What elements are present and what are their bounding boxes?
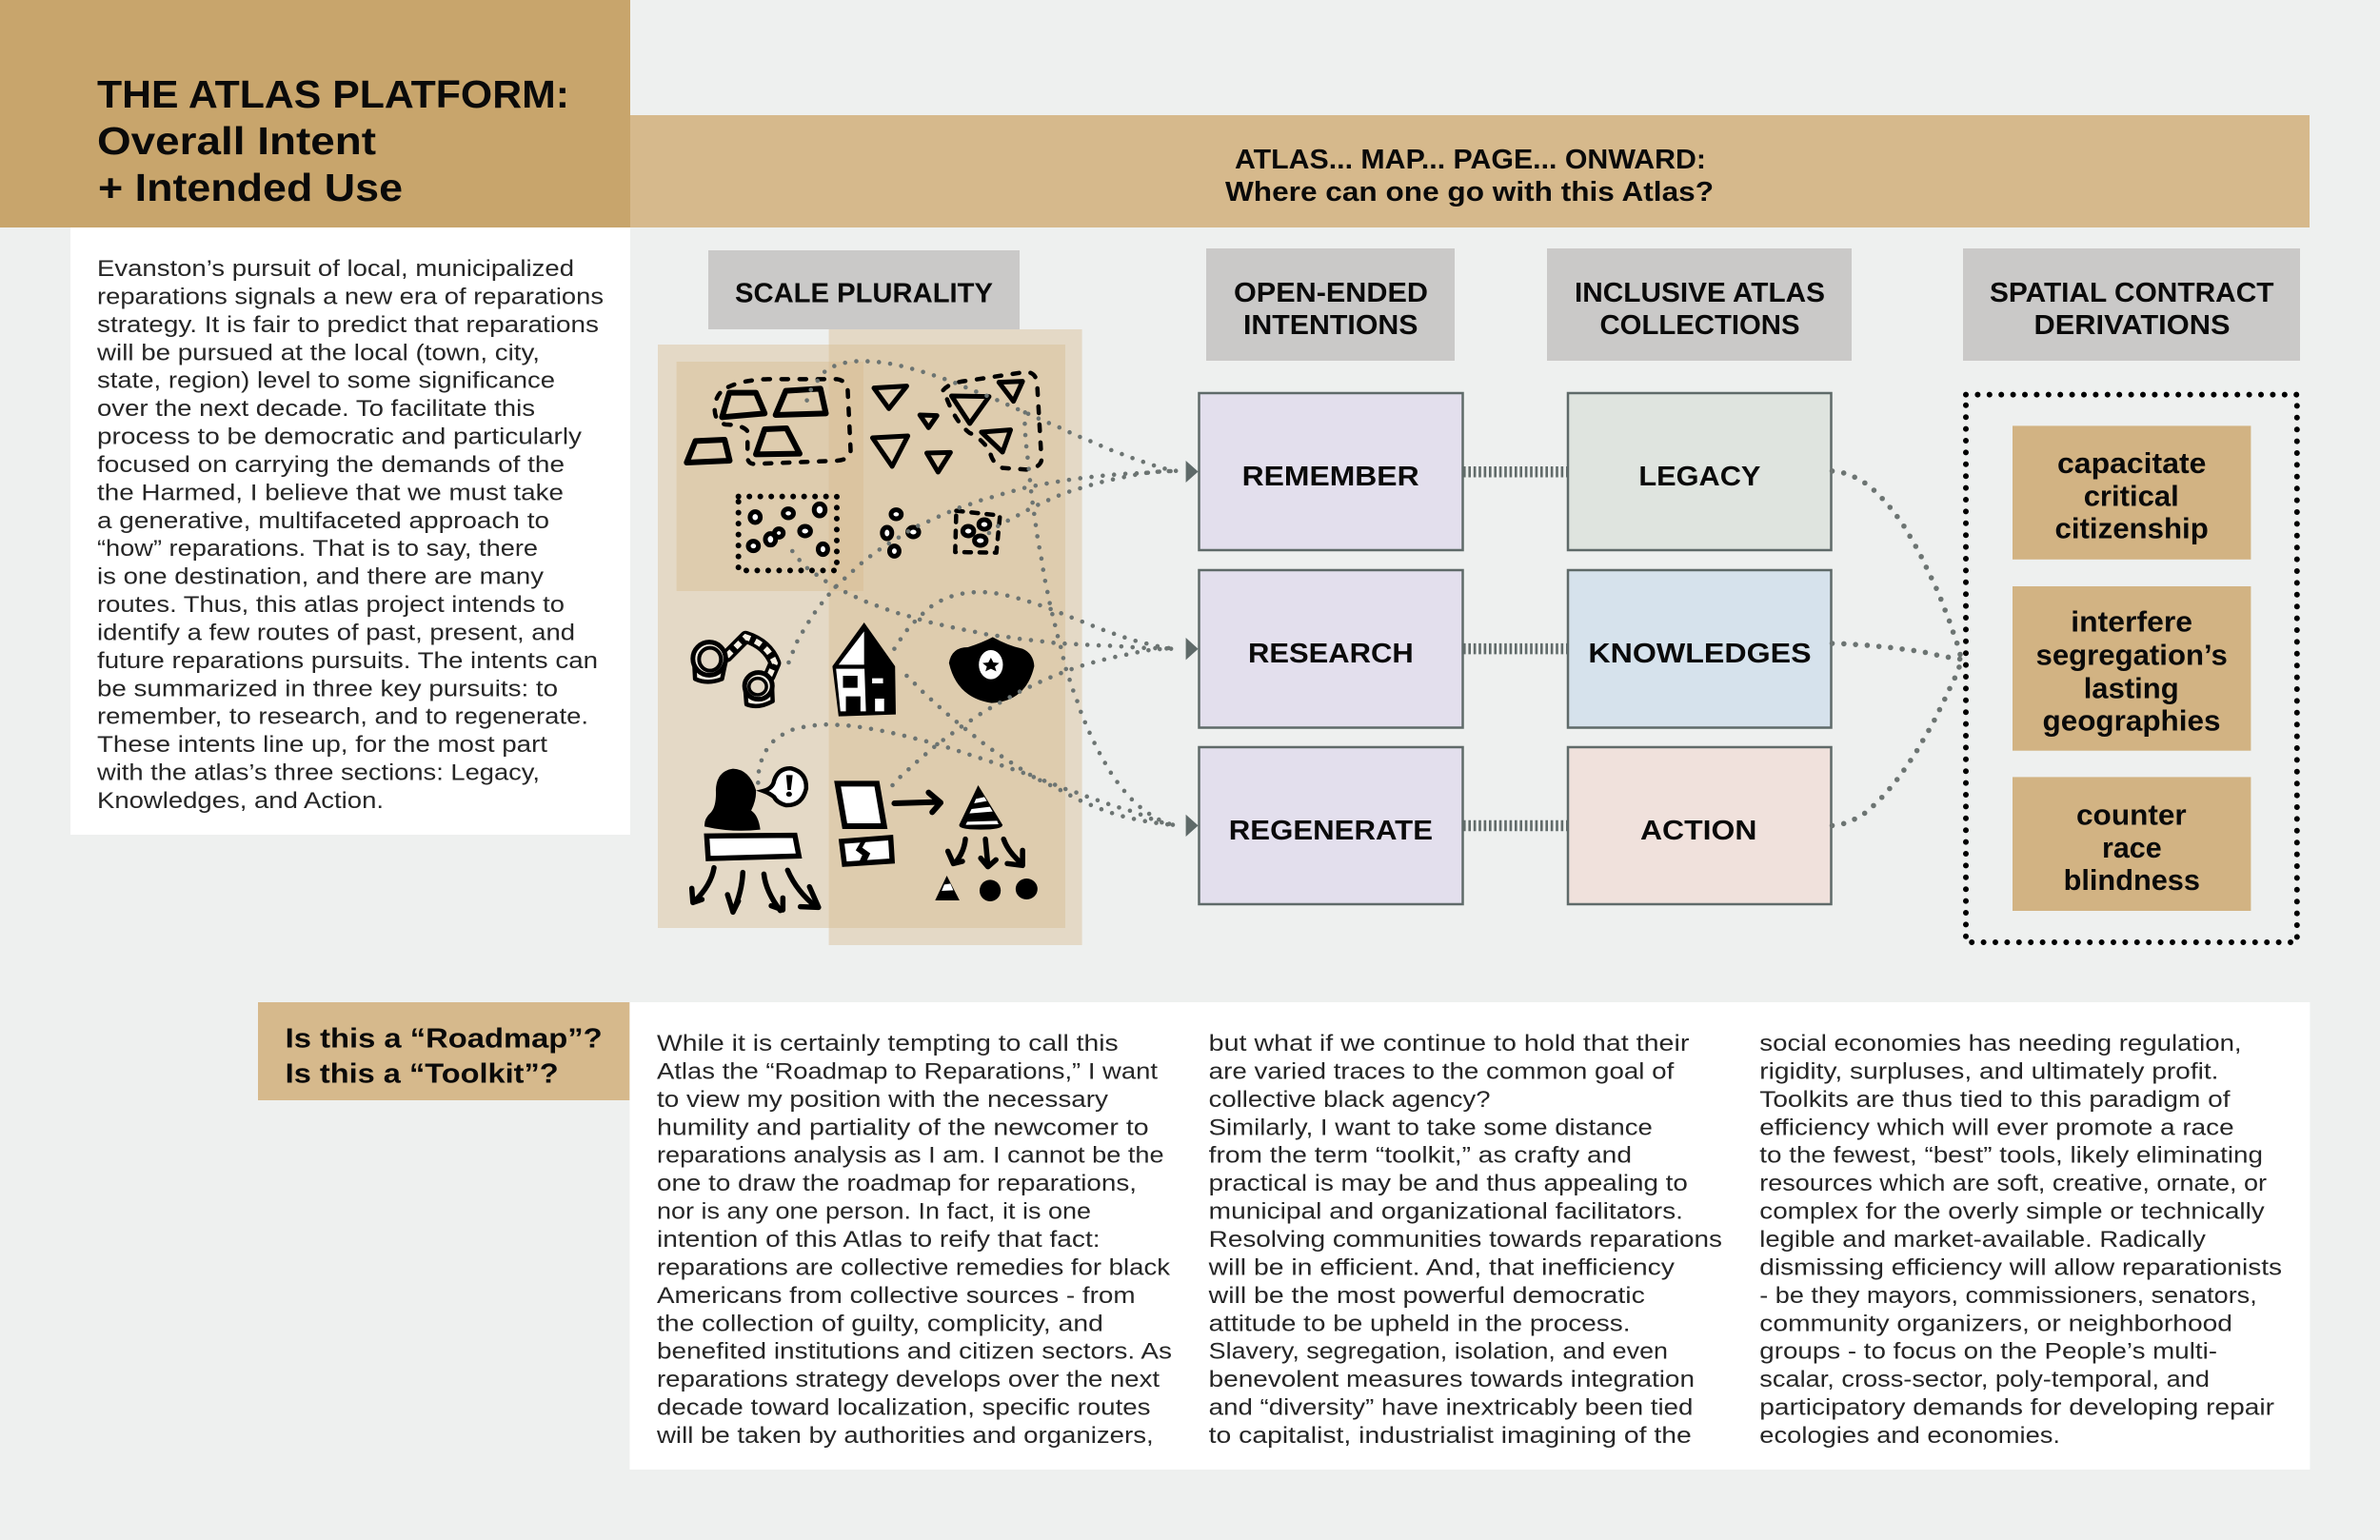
panel: scale plurality overlapping swatches [658, 329, 1082, 945]
box: action: ACTION [1640, 816, 1756, 846]
intro text panel: focused on carrying the demands of the [97, 452, 565, 478]
text column 1: one to draw the roadmap for reparations, [657, 1171, 1137, 1196]
intro text panel: process to be democratic and particularly [97, 424, 582, 449]
title block [0, 0, 630, 227]
intro text panel: identify a few routes of past, present, and [97, 621, 575, 645]
text column 1: to view my position with the necessary [657, 1087, 1108, 1113]
intro text panel: These intents line up, for the most part [97, 732, 547, 758]
text column 3: community organizers, or neighborhood [1759, 1311, 2232, 1336]
text column 3: groups - to focus on the People’s multi- [1759, 1339, 2217, 1365]
intro text panel: remember, to research, and to regenerate. [97, 704, 588, 730]
box: counter race blindness [2013, 777, 2251, 911]
text column 1: decade toward localization, specific routes [657, 1395, 1150, 1421]
text column 2: Slavery, segregation, isolation, and even [1209, 1339, 1668, 1365]
box: regenerate [1200, 747, 1462, 904]
heading: open-ended intentions: INTENTIONS [1243, 310, 1418, 341]
intro text panel [70, 227, 630, 835]
intro text panel: the Harmed, I believe that we must take [97, 480, 564, 505]
icon: loose circles [883, 510, 919, 556]
icon: dashed circle group [955, 511, 1000, 553]
box: research [1200, 570, 1462, 727]
box: capacitate critical citizenship: critical [2084, 479, 2179, 512]
text column 3: social economies has needing regulation, [1759, 1031, 2242, 1056]
box: capacitate critical citizenship [2013, 425, 2251, 560]
text column 1: humility and partiality of the newcomer to [657, 1115, 1149, 1140]
intro text panel: will be pursued at the local (town, city, [96, 340, 540, 365]
heading: spatial contract derivations [1963, 248, 2300, 361]
title block: Overall Intent [97, 119, 376, 163]
top banner: atlas map page onward [630, 115, 2310, 227]
title block: THE ATLAS PLATFORM: [97, 72, 569, 116]
text column 2: but what if we continue to hold that their [1209, 1031, 1689, 1056]
box: remember: REMEMBER [1242, 462, 1419, 492]
text column 1: Atlas the “Roadmap to Reparations,” I want [657, 1058, 1158, 1084]
text column 2 [1208, 1031, 1722, 1449]
heading: open-ended intentions: OPEN-ENDED [1234, 278, 1428, 308]
callout: roadmap or toolkit: Is this a “Roadmap”? [286, 1024, 603, 1055]
text column 3: - be they mayors, commissioners, senators, [1759, 1283, 2257, 1309]
text column 3: efficiency which will ever promote a race [1759, 1115, 2234, 1140]
text column 1: Americans from collective sources - from [657, 1283, 1136, 1309]
intro text panel: state, region) level to some significance [97, 368, 555, 394]
text column 2: will be in efficient. And, that inefficiency [1208, 1254, 1675, 1280]
heading: spatial contract derivations: SPATIAL CONTRACT [1990, 278, 2274, 308]
top banner: atlas map page onward: ATLAS... MAP... PAGE... ONWARD: [1235, 145, 1706, 175]
box: research: RESEARCH [1248, 639, 1414, 669]
text column 1: will be taken by authorities and organizers, [656, 1423, 1154, 1449]
intro text panel: is one destination, and there are many [97, 564, 544, 590]
icon: police hat [949, 637, 1034, 703]
text column 1 [656, 1031, 1172, 1449]
box: counter race blindness: blindness [2064, 863, 2200, 897]
intro text panel: Knowledges, and Action. [97, 788, 384, 814]
dotted connectors: collections to spatial contract [1833, 471, 1961, 825]
text column 1: reparations strategy develops over the next [657, 1367, 1160, 1392]
box: interfere segregation's lasting geographies: lasting [2084, 671, 2179, 704]
callout: roadmap or toolkit: Is this a “Toolkit”? [286, 1058, 559, 1089]
text column 1: the collection of guilty, complicity, and [657, 1311, 1103, 1336]
heading: spatial contract derivations: DERIVATIONS [2033, 310, 2230, 341]
intro text panel: over the next decade. To facilitate this [97, 396, 535, 422]
text column 2: benevolent measures towards integration [1209, 1367, 1695, 1392]
icon: trapezoid cluster [686, 379, 851, 464]
box: interfere segregation's lasting geographies: segregation’s [2035, 638, 2228, 672]
intro text panel: Evanston’s pursuit of local, municipalized [97, 256, 574, 282]
icon: house [832, 622, 896, 717]
heading: inclusive atlas collections: COLLECTIONS [1599, 310, 1799, 341]
text column 2: are varied traces to the common goal of [1209, 1058, 1675, 1084]
intro text panel: with the atlas’s three sections: Legacy, [96, 760, 540, 786]
intro text panel: reparations signals a new era of reparations [97, 284, 604, 309]
text column 2: practical is may be and thus appealing to [1209, 1171, 1688, 1196]
box: regenerate: REGENERATE [1229, 816, 1433, 846]
heading: scale plurality [708, 250, 1020, 329]
text column 1: reparations analysis as I am. I cannot be the [657, 1143, 1164, 1169]
icons: scale plurality sketches [686, 372, 1041, 912]
text column 2: Similarly, I want to take some distance [1209, 1115, 1653, 1140]
text column 3: Toolkits are thus tied to this paradigm of [1759, 1087, 2231, 1113]
box: remember [1200, 393, 1462, 550]
callout: roadmap or toolkit [258, 1002, 629, 1100]
intro text panel: a generative, multifaceted approach to [97, 508, 549, 534]
icon: handcuffs [693, 637, 775, 706]
box: legacy: LEGACY [1638, 462, 1760, 492]
heading: scale plurality: SCALE PLURALITY [735, 278, 993, 308]
icon: dotted circle group [739, 497, 837, 570]
text column 1: nor is any one person. In fact, it is one [657, 1199, 1091, 1225]
text column 2: Resolving communities towards reparations [1209, 1227, 1722, 1253]
intro text panel: strategy. It is fair to predict that reparations [97, 312, 599, 338]
text column 2: from the term “toolkit,” as crafty and [1209, 1143, 1632, 1169]
text column 2: will be the most powerful democratic [1208, 1283, 1645, 1309]
icon: triangle cluster [872, 372, 1041, 472]
box: knowledges: KNOWLEDGES [1588, 639, 1812, 669]
box: action [1568, 747, 1832, 904]
text column 3: participatory demands for developing repair [1759, 1395, 2274, 1421]
dotted connectors: sketches to intentions [758, 361, 1178, 825]
text column 3: scalar, cross-sector, poly-temporal, and [1759, 1367, 2210, 1392]
text column 1: While it is certainly tempting to call this [657, 1031, 1119, 1056]
box: capacitate critical citizenship: citizenship [2054, 511, 2209, 544]
text column 3: rigidity, surpluses, and ultimately profit. [1759, 1058, 2218, 1084]
text column 3: legible and market-available. Radically [1759, 1227, 2206, 1253]
heading: open-ended intentions [1206, 248, 1455, 361]
intro text panel: “how” reparations. That is to say, there [97, 536, 538, 562]
text column 1: reparations are collective remedies for black [657, 1254, 1171, 1280]
heading: inclusive atlas collections [1547, 248, 1852, 361]
text column 1: benefited institutions and citizen sectors. As [657, 1339, 1172, 1365]
box: interfere segregation's lasting geographies [2013, 586, 2251, 751]
text column 3: dismissing efficiency will allow reparationists [1759, 1254, 2282, 1280]
intro text panel: routes. Thus, this atlas project intends to [97, 592, 565, 618]
text column 3: complex for the overly simple or technically [1759, 1199, 2265, 1225]
intro text panel: be summarized in three key pursuits: to [97, 676, 558, 701]
intro text panel: future reparations pursuits. The intents can [97, 648, 598, 674]
icon: screen, split document and cones [838, 783, 1038, 901]
hatched links: intentions to collections [1463, 472, 1567, 826]
box: legacy [1568, 393, 1832, 550]
title block: + Intended Use [98, 166, 403, 209]
text column 1: intention of this Atlas to reify that fact: [657, 1227, 1101, 1253]
box: capacitate critical citizenship: capacitate [2057, 446, 2206, 480]
text column 3: to the fewest, “best” tools, likely eliminating [1759, 1143, 2263, 1169]
top banner: atlas map page onward: Where can one go with this Atlas? [1225, 177, 1714, 207]
text column 2: and “diversity” have inextricably been tied [1209, 1395, 1693, 1421]
text column 2: collective black agency? [1209, 1087, 1491, 1113]
text column 2: municipal and organizational facilitators. [1209, 1199, 1683, 1225]
text column 3: ecologies and economies. [1759, 1423, 2060, 1449]
arrowheads into intentions [1186, 461, 1199, 837]
icon: person speaking [692, 768, 819, 912]
box: knowledges [1568, 570, 1832, 727]
panel: roadmap and toolkit essay [629, 1002, 2310, 1470]
text column 3 [1759, 1031, 2282, 1449]
box: interfere segregation's lasting geographies: geographies [2043, 704, 2220, 738]
text column 3: resources which are soft, creative, ornate, or [1759, 1171, 2267, 1196]
box: interfere segregation's lasting geographies: interfere [2071, 605, 2192, 639]
text column 2: to capitalist, industrialist imagining of the [1209, 1423, 1692, 1449]
box: counter race blindness: counter [2076, 799, 2187, 832]
box: counter race blindness: race [2102, 831, 2162, 864]
text column 2: attitude to be upheld in the process. [1209, 1311, 1630, 1336]
dotted frame: spatial contract derivations [1966, 395, 2297, 942]
heading: inclusive atlas collections: INCLUSIVE ATLAS [1575, 278, 1825, 308]
